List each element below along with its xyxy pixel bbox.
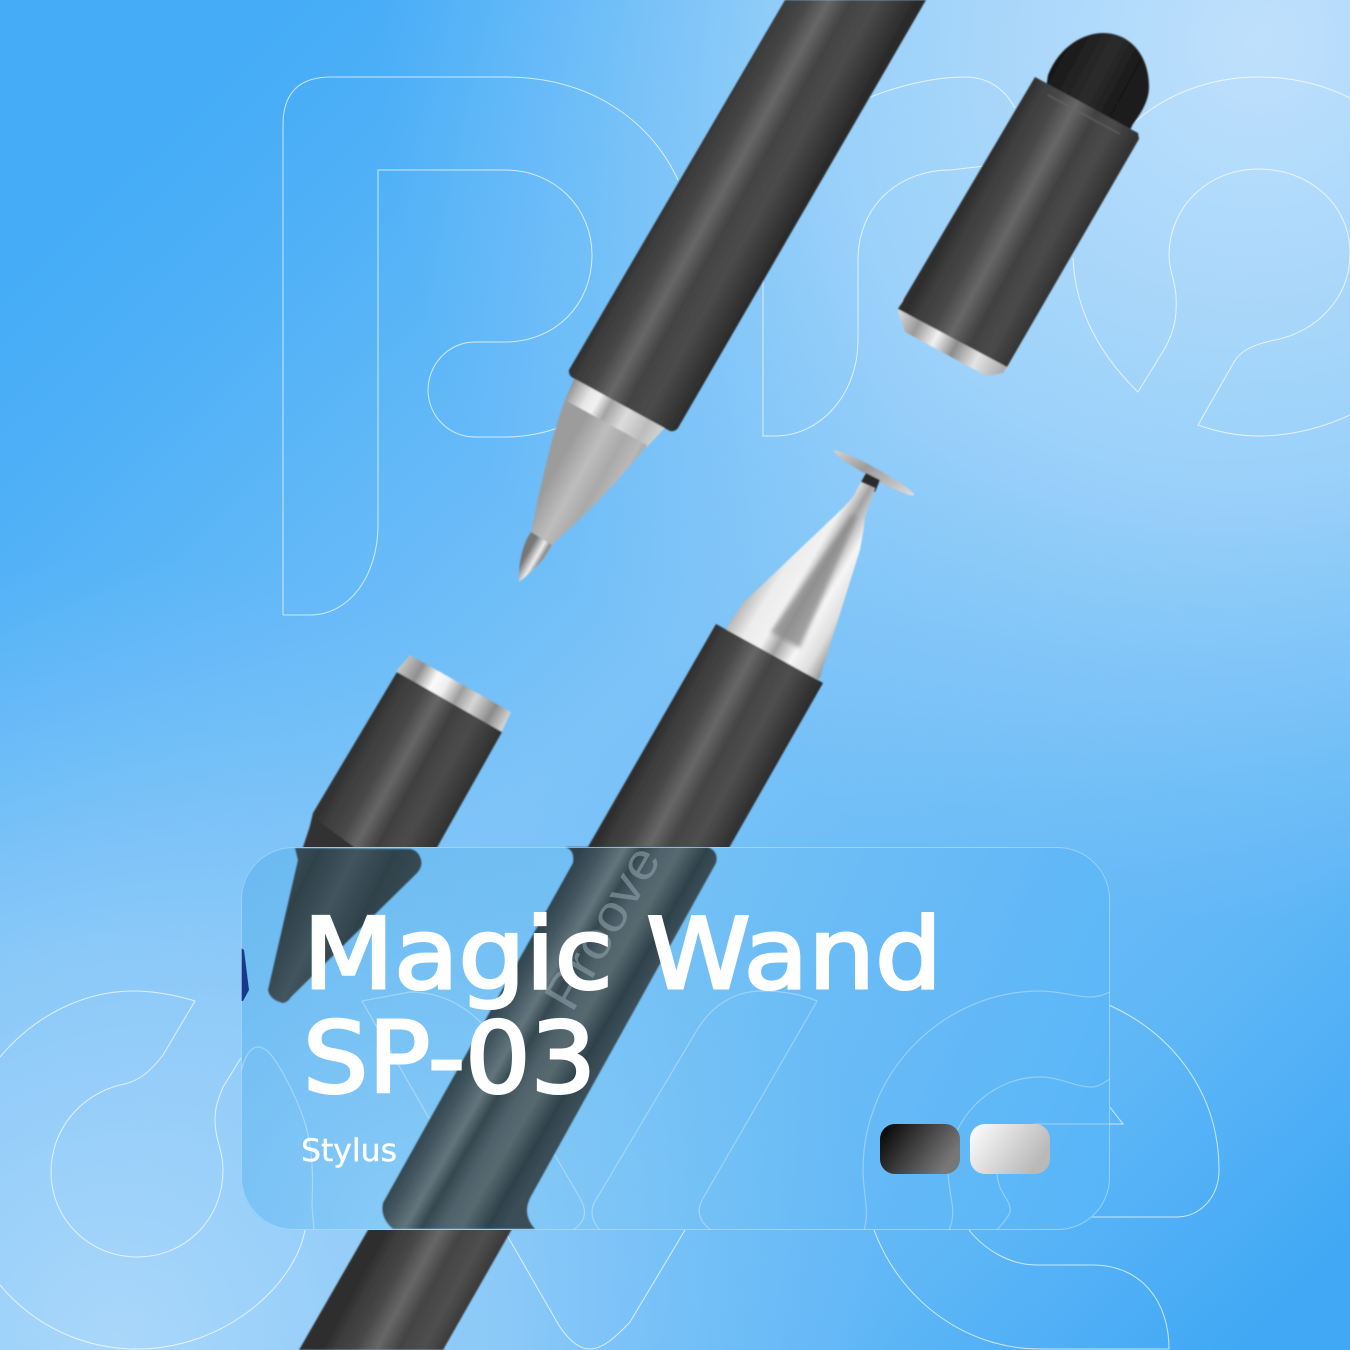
chamfer	[302, 817, 358, 850]
rubber neck	[860, 473, 880, 492]
colour swatch: white	[970, 1124, 1050, 1174]
title: Magic Wand: Magic Wand	[303, 898, 942, 1012]
title: SP-03: SP-03	[303, 1002, 596, 1116]
pen nib	[519, 532, 552, 582]
glass card	[241, 836, 1110, 1230]
rubber dome tip	[1045, 33, 1149, 140]
metal collar	[565, 370, 670, 447]
black barrel	[569, 0, 926, 431]
metal end ring	[898, 300, 1012, 376]
refracted blue sliver	[241, 948, 249, 1001]
colour swatch: black	[880, 1124, 960, 1174]
card border	[242, 848, 1110, 1230]
cap barrel	[898, 77, 1139, 367]
metal ring	[395, 655, 511, 735]
lettering seen through glass	[241, 991, 1110, 1230]
lower stylus: disc tip end	[299, 446, 917, 1350]
silver cone	[725, 482, 875, 690]
subtitle: Stylus: Stylus	[301, 1133, 397, 1169]
precision disc	[831, 446, 917, 500]
shoulder line	[1048, 95, 1120, 134]
card fill	[241, 847, 1110, 1230]
outlined brand lettering: bottom row	[0, 991, 1219, 1349]
grey metal cone	[531, 400, 647, 545]
refracted lower barrel stylus	[382, 847, 717, 1229]
black barrel	[299, 624, 823, 1350]
lower left barrel section	[302, 655, 511, 860]
outlined brand lettering: top row	[283, 77, 1350, 615]
upper stylus: ballpoint end	[519, 0, 926, 582]
cone shadow streak	[771, 514, 857, 648]
upper right stylus cap with rubber dome	[898, 33, 1149, 376]
card lower glow	[241, 847, 1110, 1230]
refracted cap section	[268, 848, 421, 1003]
black barrel	[302, 672, 502, 860]
refracted brand logo on barrel: Proove	[533, 836, 672, 1020]
